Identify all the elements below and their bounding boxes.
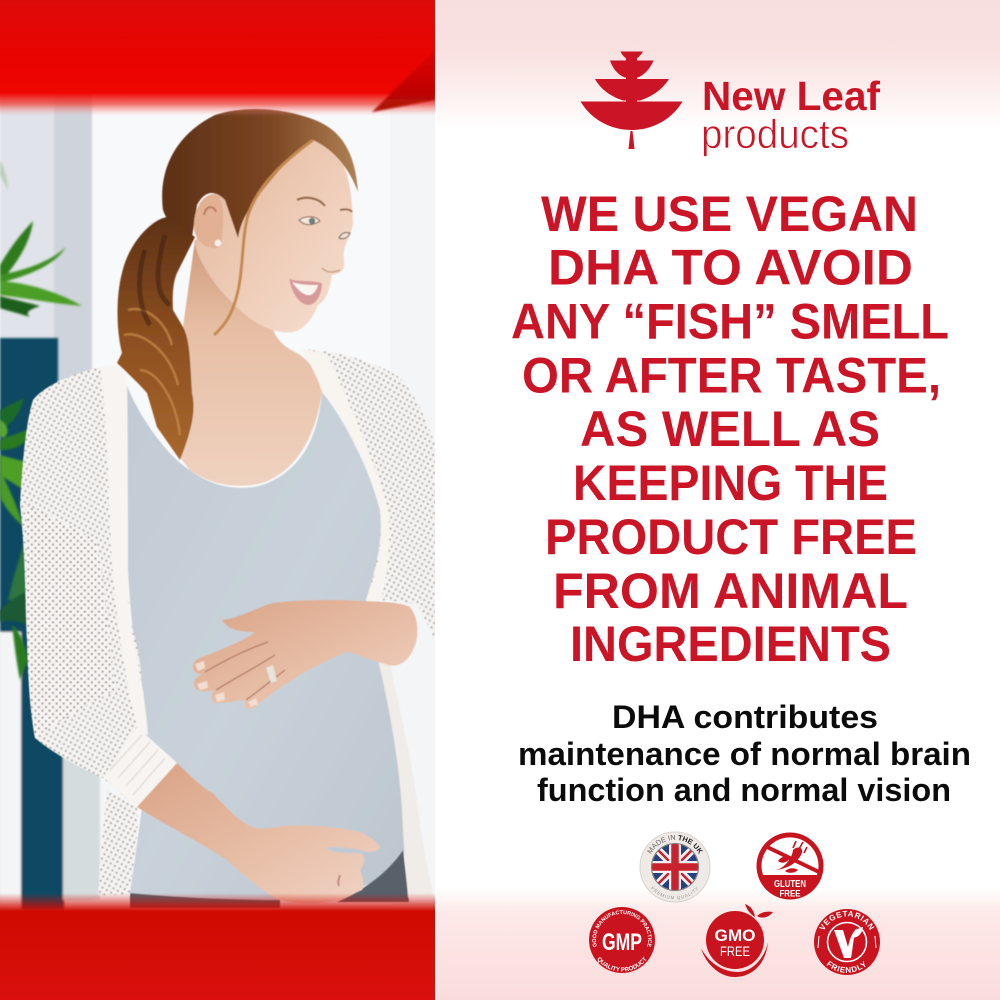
woman figure xyxy=(20,109,435,908)
heading xyxy=(511,186,949,672)
logo wordmark: products xyxy=(701,111,849,157)
badge: gluten free: GLUTEN xyxy=(774,879,806,890)
heading: PRODUCT FREE xyxy=(545,509,917,565)
badge: GMP: QUALITY PRODUCT xyxy=(598,956,646,972)
badge: GMP: GMP xyxy=(602,929,642,956)
bottom red band xyxy=(0,893,435,1000)
facial features xyxy=(289,198,352,305)
heading: ANY “FISH” SMELL xyxy=(511,294,949,350)
neck and chest xyxy=(165,240,322,486)
lower arm and hand xyxy=(137,763,380,903)
heading: WE USE VEGAN xyxy=(541,186,918,242)
pants xyxy=(130,850,409,908)
badge: GMP xyxy=(589,907,655,973)
heading: OR AFTER TASTE, xyxy=(522,348,941,404)
badge: GMO free: FREE xyxy=(720,943,750,959)
heading: DHA TO AVOID xyxy=(548,240,913,296)
body text: DHA claim: maintenance of normal brain xyxy=(518,736,971,772)
badge: GMO free xyxy=(701,904,773,977)
panel: right background xyxy=(435,0,1000,1000)
badge: made in the UK xyxy=(640,832,710,902)
badge: GMO free: GMO xyxy=(714,926,756,945)
teal panel behind plant xyxy=(0,336,101,910)
ear with earring xyxy=(194,194,223,248)
logo icon: stacked leaf xyxy=(580,52,682,149)
heading: FROM ANIMAL xyxy=(553,563,908,619)
cardigan lower left front xyxy=(98,790,138,895)
hair top xyxy=(162,109,358,238)
plant leaves upper xyxy=(0,160,82,317)
badge: made in the UK: MADE IN THE UK xyxy=(647,834,703,854)
body text: DHA claim: function and normal vision xyxy=(537,772,951,808)
loose hair strands xyxy=(214,140,313,335)
badge: made in the UK: PREMIUM QUALITY xyxy=(651,886,698,900)
grey t-shirt xyxy=(125,380,404,901)
badge: gluten free xyxy=(756,832,824,900)
badge: vegetarian friendly: VEGETARIAN xyxy=(819,910,874,930)
heading: KEEPING THE xyxy=(573,455,888,511)
badge: GMP: GOOD MANUFACTURING PRACTICE xyxy=(592,910,652,947)
body text: DHA claim: DHA contributes xyxy=(612,699,878,735)
left cardigan sleeve xyxy=(20,365,177,808)
union flag xyxy=(652,844,698,890)
badge: vegetarian friendly xyxy=(814,909,880,975)
right cardigan xyxy=(300,349,435,897)
upper hand resting on belly xyxy=(193,600,417,709)
panel: photo of pregnant woman xyxy=(0,0,435,1000)
badge: vegetarian friendly: FRIENDLY xyxy=(826,960,866,973)
heading: AS WELL AS xyxy=(580,401,880,457)
top red band xyxy=(0,0,435,116)
face xyxy=(195,137,353,332)
logo: New Leaf products xyxy=(580,52,880,157)
plant leaves lower xyxy=(0,398,28,680)
photo background wall xyxy=(0,90,435,920)
ponytail xyxy=(117,217,195,460)
badge: gluten free: FREE xyxy=(780,888,800,900)
body text: DHA claim xyxy=(518,699,971,808)
logo wordmark: New Leaf xyxy=(702,73,880,119)
heading: INGREDIENTS xyxy=(570,616,891,672)
logo wordmark xyxy=(701,73,880,157)
